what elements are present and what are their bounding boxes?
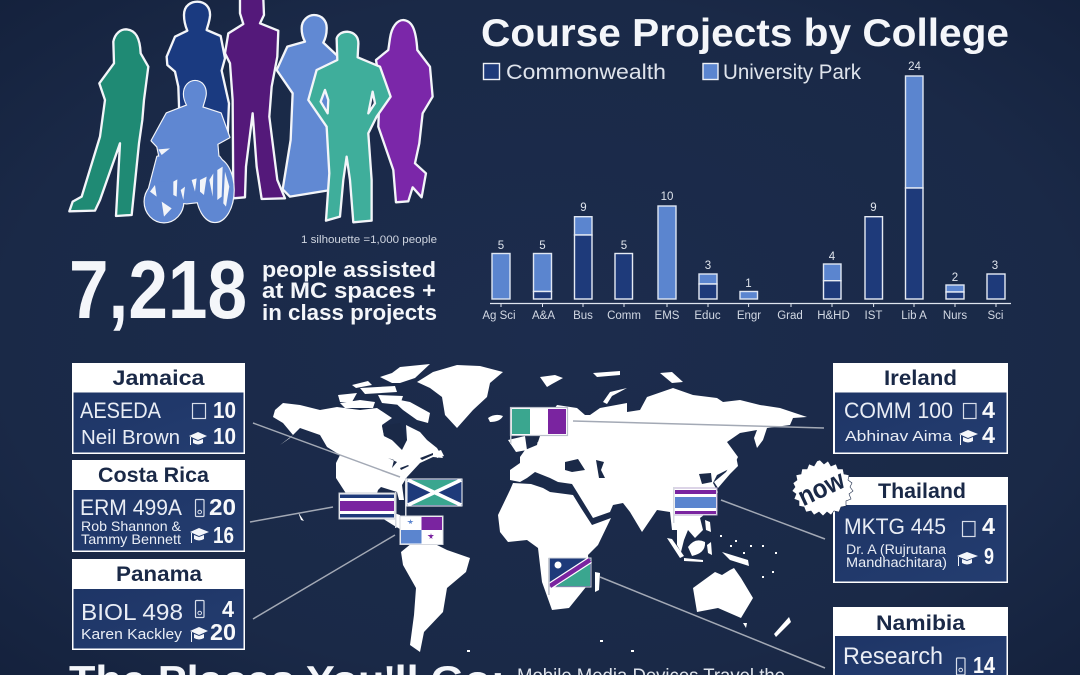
bar: H&HD 4: 4 (829, 251, 836, 263)
bar: Bus 9: Bus (573, 310, 593, 322)
bar: Lib A 24: Lib A (901, 310, 927, 322)
row: Abhinav Aima 4: 4 (982, 422, 995, 448)
bar: Nurs 2: 2 (952, 272, 958, 284)
connector line: Namibia (600, 577, 825, 668)
heading: Panama: Panama (116, 563, 202, 586)
bar: Engr 1 (737, 278, 761, 322)
panel: Jamaica (72, 363, 245, 454)
row: COMM 100 4: 4 (982, 397, 995, 423)
world map (273, 364, 807, 652)
bar: Educ 3: Educ (694, 310, 721, 322)
bar: Comm 5: 5 (621, 240, 627, 252)
bar: Engr 1: Engr (737, 310, 761, 322)
bar: Ag Sci 5 (482, 240, 516, 322)
row: Dr. A (Rujrutana Mandhachitara) 9: 9 (984, 543, 994, 569)
text block: people assisted description (262, 257, 437, 325)
bar: Engr 1: 1 (745, 278, 752, 290)
row: AESEDA 10: 10 (213, 397, 236, 423)
panel: Namibia (833, 607, 1008, 675)
connector line: Costa Rica (250, 507, 333, 522)
title: course projects by college: Course Projects by College (481, 12, 1009, 55)
connector line: Ireland (573, 421, 824, 428)
row: Neil Brown 10 (81, 423, 236, 449)
bar: H&HD 4: H&HD (817, 310, 850, 322)
row: Rob Shannon and Tammy Bennett 16 (81, 518, 234, 548)
silhouette: standing man dark purple (225, 0, 285, 199)
row: BIOL 498 4: BIOL 498 (81, 599, 183, 625)
row: Abhinav Aima 4: Abhinav Aima (845, 428, 953, 445)
landmass: Canadian Arctic islands (338, 364, 430, 423)
row: Research 14 (843, 643, 995, 675)
label: Grad 0: Grad (777, 310, 803, 322)
silhouette: standing man light blue (277, 15, 340, 197)
bar: A&A 5: 5 (539, 240, 546, 252)
bar: Sci 3 (987, 260, 1005, 322)
flag: Jamaica (405, 478, 462, 516)
bar: Lib A 24: 24 (908, 61, 921, 73)
bar: Nurs 2 (943, 272, 967, 322)
row: MKTG 445 4: 4 (982, 513, 995, 539)
bar: Bus 9: 9 (580, 202, 587, 214)
row: Karen Kackley 20: 20 (210, 619, 236, 645)
connector line: Panama (253, 535, 395, 619)
panel: Costa Rica (72, 460, 245, 552)
row: MKTG 445 4: MKTG 445 (844, 514, 946, 539)
text block: people assisted description: in class projects (262, 300, 437, 325)
bar: IST 9: 9 (870, 202, 877, 214)
row: BIOL 498 4: 4 (222, 596, 234, 622)
landmass: Africa (498, 483, 611, 610)
bar: EMS 10 (655, 191, 680, 322)
row: ERM 499A 20 (80, 494, 236, 520)
row: COMM 100 4: COMM 100 (844, 398, 953, 423)
caption: silhouette scale: 1 silhouette =1,000 people (301, 234, 437, 246)
heading: Jamaica: Jamaica (112, 367, 205, 390)
bar: Bus 9 (573, 202, 593, 322)
row: Rob Shannon and Tammy Bennett 16: Rob Shannon & (81, 518, 182, 534)
bar: Comm 5 (607, 240, 641, 322)
panel: Thailand (833, 477, 1008, 583)
bar: Educ 3 (694, 260, 721, 322)
heading: Costa Rica: Costa Rica (98, 464, 209, 487)
row: Dr. A (Rujrutana Mandhachitara) 9: Mandhachitara) (846, 555, 947, 570)
row: Rob Shannon and Tammy Bennett 16: 16 (213, 522, 234, 548)
bar: H&HD 4 (817, 251, 850, 322)
bar: Ag Sci 5: Ag Sci (482, 310, 516, 322)
bar: Sci 3: Sci (988, 310, 1003, 322)
illustration: group of people silhouettes (69, 0, 433, 222)
flag: Costa Rica (339, 492, 396, 528)
bar: Sci 3: 3 (992, 260, 998, 272)
bar: Ag Sci 5: 5 (498, 240, 504, 252)
row: Karen Kackley 20 (81, 619, 236, 645)
row: BIOL 498 4 (81, 596, 234, 625)
landmass: North America (273, 403, 443, 532)
legend: commonwealth and university park: University Park (723, 61, 861, 84)
bar: Comm 5: Comm (607, 310, 641, 322)
legend: commonwealth and university park (484, 61, 861, 84)
row: Neil Brown 10: 10 (213, 423, 236, 449)
bar: IST 9 (865, 202, 882, 322)
row: Research 14: Research (843, 643, 943, 670)
row: AESEDA 10 (80, 397, 236, 423)
row: Rob Shannon and Tammy Bennett 16: Tammy Bennett (81, 531, 181, 547)
silhouette: standing man dark blue (167, 2, 229, 137)
flag: Ireland (510, 408, 568, 444)
text block: people assisted description: people assisted (262, 257, 436, 282)
landmass: Greenland (417, 365, 503, 428)
text block: people assisted description: at MC spaces + (262, 278, 436, 303)
bar: Nurs 2: Nurs (943, 310, 967, 322)
silhouette: standing woman green (69, 29, 148, 216)
silhouette: standing man teal (308, 32, 391, 222)
big number: people assisted: 7,218 (69, 243, 247, 336)
silhouette: person in wheelchair (145, 81, 234, 222)
landmass: South America (401, 542, 470, 652)
landmass: Japan, British Isles and Iceland (488, 415, 738, 488)
bar chart: course projects by college (482, 61, 1011, 322)
row: Dr. A (Rujrutana Mandhachitara) 9 (846, 542, 994, 570)
bar: Lib A 24 (901, 61, 927, 322)
flag: Namibia (548, 558, 591, 595)
flag: Thailand (673, 487, 717, 523)
row: ERM 499A 20: 20 (209, 494, 236, 520)
bar: EMS 10: 10 (661, 191, 673, 203)
bar: EMS 10: EMS (655, 310, 680, 322)
heading: Thailand: Thailand (878, 480, 966, 503)
legend: commonwealth and university park: Commonwealth (506, 61, 666, 84)
flag: Panama (400, 516, 443, 544)
row: ERM 499A 20: ERM 499A (80, 495, 182, 520)
bar: IST 9: IST (865, 310, 882, 322)
bar: A&A 5 (532, 240, 555, 322)
row: Dr. A (Rujrutana Mandhachitara) 9: Dr. A (Rujrutana (846, 542, 947, 557)
bar: Educ 3: 3 (705, 260, 711, 272)
connector line: Jamaica (253, 423, 400, 477)
silhouette: standing woman purple (376, 20, 433, 202)
bar: A&A 5: A&A (532, 310, 555, 322)
scattered islands (298, 371, 777, 652)
badge: now: now (793, 464, 850, 512)
connector line: Thailand (721, 500, 825, 539)
panel: Ireland (833, 363, 1008, 454)
row: MKTG 445 4 (844, 513, 995, 539)
panel: Panama (72, 559, 245, 650)
row: Karen Kackley 20: Karen Kackley (81, 626, 183, 643)
heading: Ireland: Ireland (884, 367, 957, 390)
row: AESEDA 10: AESEDA (80, 398, 161, 423)
landmass: Australia and islands (595, 520, 791, 637)
landmass: Eurasia (510, 388, 807, 552)
row: Abhinav Aima 4 (845, 422, 995, 448)
heading: Namibia: Namibia (876, 612, 965, 635)
row: Neil Brown 10: Neil Brown (81, 427, 180, 449)
inland seas (382, 423, 712, 484)
